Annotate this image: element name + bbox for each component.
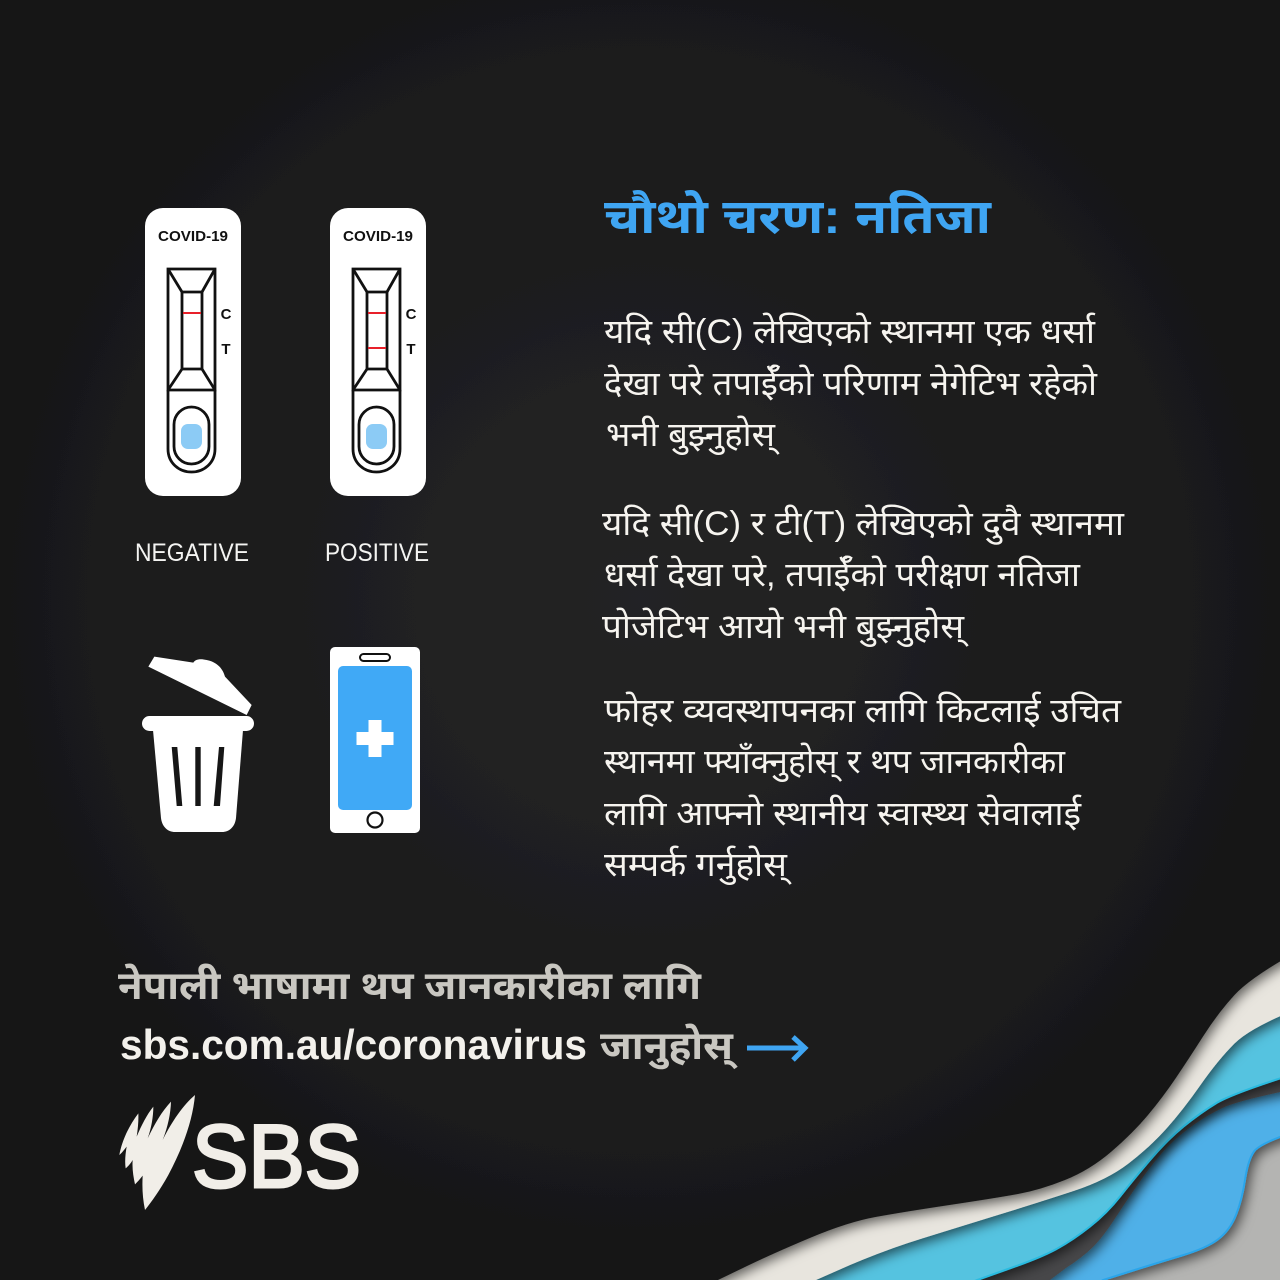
test card: positive: T: [406, 341, 416, 358]
call to action text: नेपाली भाषामा थप जानकारीका लागि: [118, 964, 702, 1008]
text block: positive result: पोजेटिभ आयो भनी बुझ्नुहोस्: [602, 607, 969, 647]
text block: disposal and contact: [604, 691, 1122, 885]
label: negative: NEGATIVE: [135, 539, 249, 567]
text block: disposal and contact: फोहर व्यवस्थापनका लागि किटलाई उचित: [604, 691, 1122, 730]
test card: negative: C: [221, 306, 232, 323]
text block: negative result: [604, 312, 1098, 455]
test card: negative: [145, 208, 241, 496]
text block: positive result: यदि सी(C) र टी(T) लेखिएको दुवै स्थानमा: [602, 504, 1125, 545]
text block: disposal and contact: स्थानमा फ्याँक्नुहोस् र थप जानकारीका: [604, 742, 1066, 782]
text block: negative result: देखा परे तपाईँको परिणाम नेगेटिभ रहेको: [604, 364, 1098, 403]
test card: positive: COVID-19: [343, 228, 413, 245]
arrow: [747, 1037, 805, 1060]
text block: positive result: [602, 504, 1125, 647]
test card: negative: COVID-19: [158, 228, 228, 245]
label: positive: POSITIVE: [325, 539, 429, 567]
call to action text: जानुहोस्: [600, 1024, 738, 1070]
logo: SBS: SBS: [192, 1106, 361, 1206]
test card: positive: C: [406, 306, 417, 323]
text block: disposal and contact: सम्पर्क गर्नुहोस्: [604, 845, 792, 885]
text block: negative result: भनी बुझ्नुहोस्: [606, 416, 780, 455]
icon: phone with medical cross: [330, 647, 420, 833]
icon: rubbish bin: [142, 657, 254, 832]
title: चौथो चरण: नतिजा: [604, 190, 992, 244]
logo: SBS: [119, 1095, 361, 1210]
call to action text: sbs.com.au/coronavirus: [120, 1021, 587, 1068]
test card: positive: [330, 208, 426, 496]
call to action text: [118, 964, 738, 1070]
text block: disposal and contact: लागि आफ्नो स्थानीय स्वास्थ्य सेवालाई: [604, 794, 1082, 833]
text block: negative result: यदि सी(C) लेखिएको स्थानमा एक धर्सा: [604, 312, 1096, 351]
text block: positive result: धर्सा देखा परे, तपाईँको परीक्षण नतिजा: [604, 555, 1081, 594]
test card: negative: T: [221, 341, 231, 358]
